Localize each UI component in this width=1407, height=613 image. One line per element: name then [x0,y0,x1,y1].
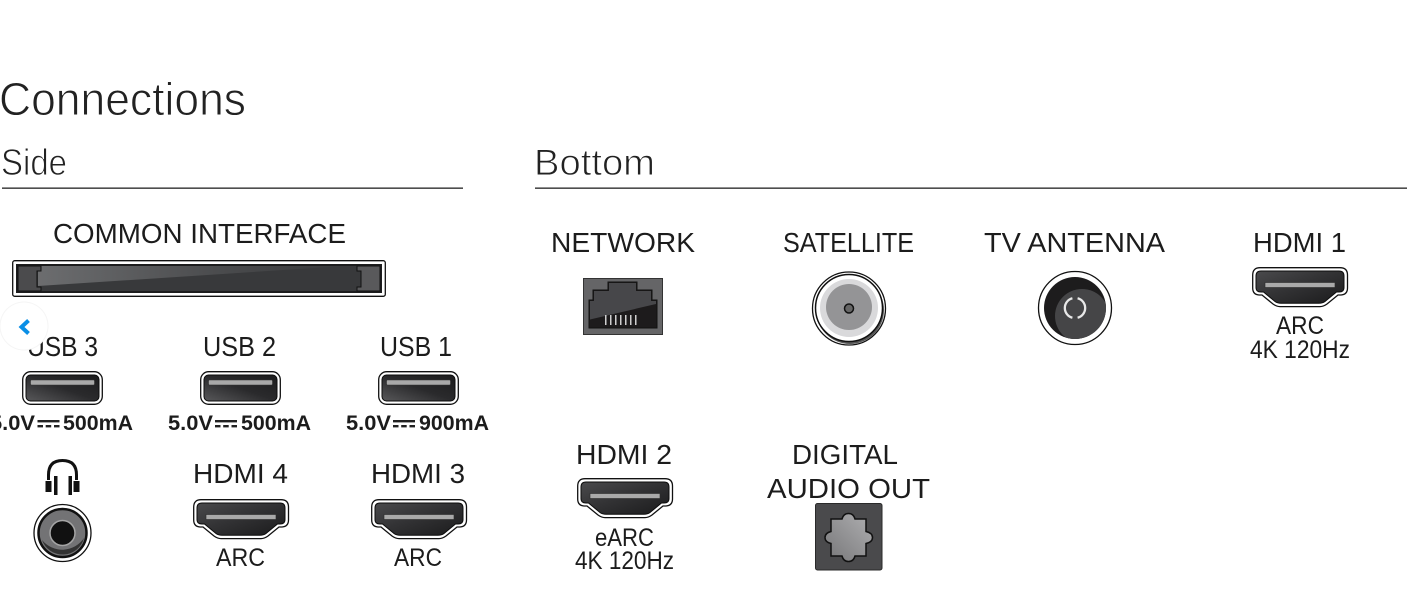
icon: hdmi 3 port [372,500,466,539]
label: hdmi 1 arc: ARC [1276,312,1324,340]
panel: bottom [534,142,1407,575]
icon: network port [584,278,662,334]
rating: usb 3 [0,412,133,435]
icon: headphones [46,460,80,495]
icon: usb 2 port [201,372,280,404]
panel: side [0,142,489,572]
label: tv antenna: TV ANTENNA [984,227,1165,258]
label: hdmi 2 resolution: 4K 120Hz [575,547,674,575]
label: digital audio out: AUDIO OUT [767,473,930,504]
back button [0,302,48,350]
icon: usb 1 port [379,372,458,404]
rating: usb 1: 5.0V [346,412,391,435]
label: hdmi 3: HDMI 3 [371,458,465,489]
label: usb 1: USB 1 [380,331,452,362]
label: hdmi 2 earc: eARC [595,524,654,552]
title: Connections [0,73,246,125]
label: hdmi 1 resolution: 4K 120Hz [1250,336,1350,364]
label: common interface: COMMON INTERFACE [53,218,346,249]
icon: tv antenna connector [1038,272,1112,344]
label: digital audio out: DIGITAL [792,439,898,470]
label: usb 2: USB 2 [203,331,276,362]
icon: usb 3 port [23,372,102,404]
icon: digital audio port [816,504,882,570]
rating: usb 2: 5.0V [168,412,213,435]
label: usb 3: USB 3 [27,331,98,362]
connections diagram [0,82,1407,570]
label: hdmi 4: HDMI 4 [193,458,288,489]
icon: hdmi 2 port [578,479,672,518]
rating: usb 1: 900mA [419,412,489,435]
icon: hdmi 1 port [1253,268,1348,307]
icon: hdmi 4 port [194,500,288,539]
rating: usb 2: 500mA [241,412,311,435]
label: hdmi 3 arc: ARC [394,544,442,572]
heading: bottom: Bottom [534,142,655,183]
rating: usb 3: 500mA [63,412,133,435]
icon: common interface slot [13,261,385,296]
rating: usb 2 [168,412,311,435]
icon: satellite connector [812,272,886,345]
label: hdmi 4 arc: ARC [216,544,265,572]
label: hdmi 2: HDMI 2 [576,439,672,470]
icon: chevron left [22,320,28,334]
label: satellite: SATELLITE [783,227,914,258]
label: digital audio out [767,439,930,504]
rating: usb 1 [346,412,489,435]
heading: side: Side [1,142,67,183]
label: network: NETWORK [551,227,695,258]
label: hdmi 1: HDMI 1 [1253,227,1346,258]
icon: headphone jack [34,504,91,562]
